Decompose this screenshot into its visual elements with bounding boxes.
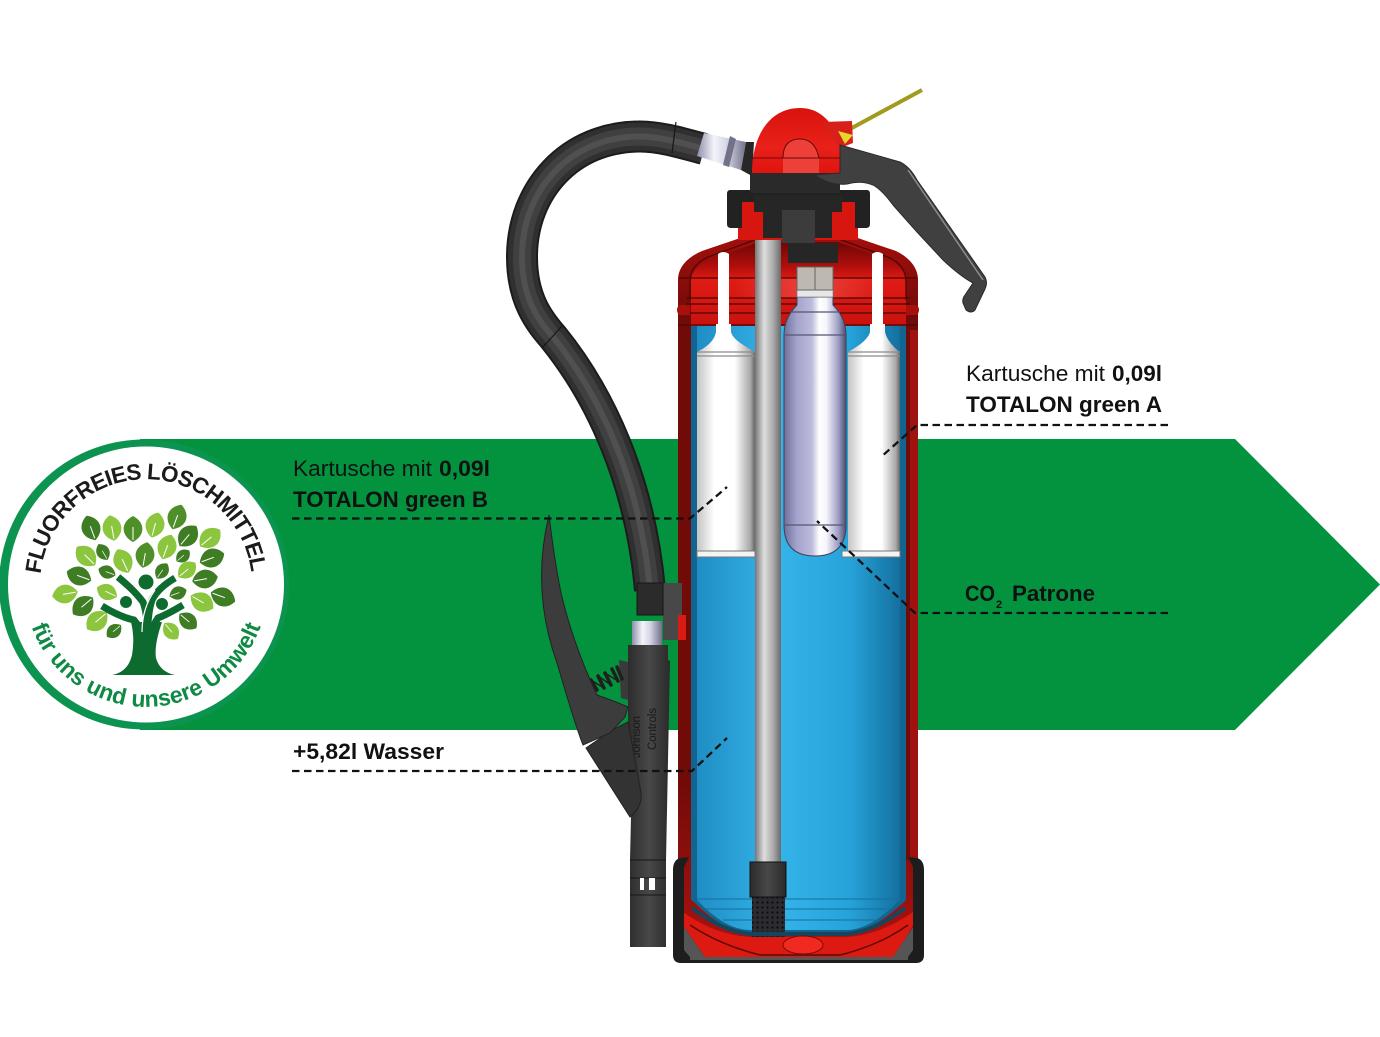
right wall outer band	[910, 330, 918, 860]
lever lower grip	[586, 722, 641, 817]
label: Kartusche A: Kartusche mit	[966, 361, 1106, 386]
red valve seat	[742, 202, 855, 230]
seam bulge	[677, 305, 919, 315]
nozzle	[619, 645, 670, 947]
nozzle side block	[619, 660, 628, 700]
valve core	[782, 210, 815, 243]
black nut flange	[727, 190, 870, 228]
label: CO2 Patrone: CO	[965, 581, 995, 606]
logo badge	[0, 440, 289, 730]
water highlight	[697, 326, 900, 930]
badge ring	[0, 440, 289, 730]
badge tagline text: für uns und unsere Umwelt	[32, 622, 261, 707]
lever handle	[815, 145, 986, 312]
label: Kartusche B: TOTALON green B	[293, 487, 488, 512]
clamp bracket	[637, 583, 686, 640]
lever grip	[542, 515, 628, 745]
cylinder wall shell	[678, 233, 918, 960]
label: Kartusche A	[966, 361, 1162, 417]
label: Kartusche B: Kartusche mit	[293, 456, 433, 481]
nozzle brand text: Johnson	[631, 716, 643, 758]
label: Wasser: +5,82l Wasser	[293, 739, 444, 764]
dome seams	[752, 139, 840, 158]
label: CO2 Patrone: 2	[996, 599, 1002, 611]
locking pin	[850, 90, 922, 129]
green arrow banner	[140, 439, 1380, 730]
water	[691, 326, 906, 933]
riser tube	[755, 236, 781, 864]
strainer	[750, 862, 786, 950]
label: Kartusche A: 0,09l	[1112, 361, 1162, 386]
collar	[738, 228, 858, 240]
lever highlight	[908, 170, 983, 280]
upper interior highlight	[735, 278, 885, 298]
label: Kartusche B: 0,09l	[439, 456, 490, 481]
yellow pin housing	[822, 121, 853, 148]
badge white disc	[8, 446, 284, 722]
right cartridge	[842, 252, 900, 557]
label: Kartusche B	[293, 456, 490, 512]
label: CO2 Patrone	[965, 581, 1095, 611]
spring	[591, 667, 622, 690]
dome inner panel	[783, 139, 819, 173]
water base lines	[697, 899, 900, 920]
inner valve parts	[754, 195, 842, 263]
label: Kartusche A: TOTALON green A	[966, 392, 1162, 417]
badge heading text: FLUORFREIES LÖSCHMITTEL	[25, 462, 265, 573]
nozzle brand text 2: Controls	[647, 708, 659, 750]
fire extinguisher	[522, 90, 986, 963]
neck block	[750, 173, 840, 193]
hose connector	[697, 133, 754, 176]
label: CO2 Patrone: Patrone	[1012, 581, 1095, 606]
shoulder seam lines	[678, 238, 918, 325]
upper interior in red	[691, 242, 906, 326]
hose	[522, 122, 704, 590]
right wall inner band	[906, 330, 910, 860]
leader lines	[292, 425, 1168, 771]
silver nozzle ring	[632, 621, 662, 645]
red dome	[752, 108, 840, 173]
CO2 cartridge	[784, 267, 846, 556]
valve head	[697, 90, 986, 312]
bottom base	[673, 857, 924, 963]
icon: tree with people	[51, 502, 238, 675]
left cartridge	[697, 252, 755, 557]
